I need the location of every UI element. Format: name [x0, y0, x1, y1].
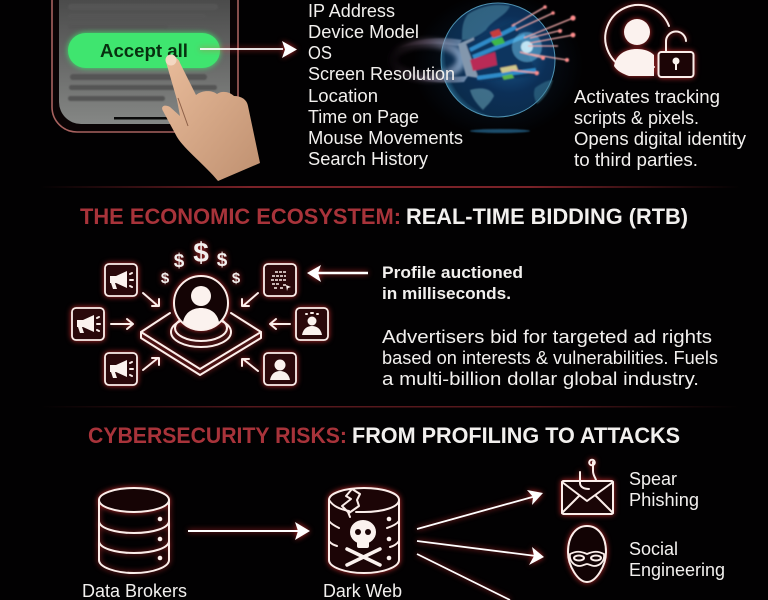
label: social engineering: Engineering [629, 560, 725, 580]
label: social engineering [629, 539, 725, 580]
skull and crossbones [347, 520, 380, 565]
advertiser box bottom left [105, 353, 137, 385]
rtb description: Advertisers bid for targeted ad rights [382, 327, 712, 347]
label: social engineering: Social [629, 539, 678, 559]
list of collected data: Screen Resolution [308, 64, 455, 84]
advertiser box middle left [72, 308, 104, 340]
heading: real-time bidding: THE ECONOMIC ECOSYSTEM: [80, 204, 401, 229]
label: spear phishing [629, 469, 699, 510]
central profile on platform [141, 276, 261, 375]
rtb description: a multi-billion dollar global industry. [382, 369, 699, 389]
rtb description: Profile auctioned [382, 263, 523, 282]
rtb auction diagram [72, 237, 328, 385]
heading: cybersecurity risks [88, 423, 680, 448]
list of collected data: Time on Page [308, 107, 419, 127]
tracking description: to third parties. [574, 150, 698, 170]
icon: pointing hand [162, 54, 260, 181]
dollar signs [161, 237, 241, 287]
arrow: to auction text [307, 265, 368, 282]
profile box middle right [296, 308, 328, 340]
icon: phishing envelope with hook [562, 460, 613, 514]
list of collected data: Mouse Movements [308, 128, 463, 148]
dollar signs: $ [217, 250, 228, 271]
arrow: accept to data [200, 41, 297, 58]
rtb description [382, 263, 718, 389]
list of collected data: IP Address [308, 1, 395, 21]
list of collected data: Device Model [308, 22, 419, 42]
arrow: brokers to dark web [188, 522, 310, 540]
tracking description: Activates tracking [574, 87, 720, 107]
dollar signs: $ [161, 270, 170, 287]
inward arrows [111, 293, 290, 371]
heading: cybersecurity risks: CYBERSECURITY RISKS: [88, 423, 347, 448]
icon: masked attacker [568, 526, 606, 582]
globe with fibre optic cable [392, 0, 583, 137]
dollar signs: $ [232, 270, 241, 287]
accept all button: Accept all [100, 41, 188, 61]
list of collected data: OS [308, 43, 332, 63]
tracking description: Opens digital identity [574, 129, 746, 149]
heading: real-time bidding: REAL-TIME BIDDING (RTB) [406, 204, 688, 229]
heading: real-time bidding [80, 204, 688, 229]
arrow: to social engineering [417, 541, 544, 565]
heading: cybersecurity risks: FROM PROFILING TO ATTACKS [352, 423, 680, 448]
dollar signs: $ [174, 251, 185, 272]
list of collected data [308, 1, 463, 169]
profile box bottom right [264, 353, 296, 385]
arrow: to spear phishing [417, 490, 543, 529]
icon: person with padlock [605, 5, 694, 77]
label: spear phishing: Spear [629, 469, 677, 489]
arrow: to third attack [417, 554, 510, 600]
data box top right [264, 264, 296, 296]
tracking description [574, 87, 746, 170]
rtb description: in milliseconds. [382, 284, 511, 303]
tracking description: scripts & pixels. [574, 108, 699, 128]
list of collected data: Location [308, 86, 378, 106]
rtb description: based on interests & vulnerabilities. Fuels [382, 348, 718, 368]
advertiser box top left [105, 264, 137, 296]
dollar signs: $ [193, 237, 209, 268]
icon: data brokers database [99, 488, 169, 573]
label: spear phishing: Phishing [629, 490, 699, 510]
phone with consent screen [52, 0, 238, 132]
icon: dark web breached database [329, 488, 399, 573]
accept all button [68, 33, 220, 68]
list of collected data: Search History [308, 149, 428, 169]
